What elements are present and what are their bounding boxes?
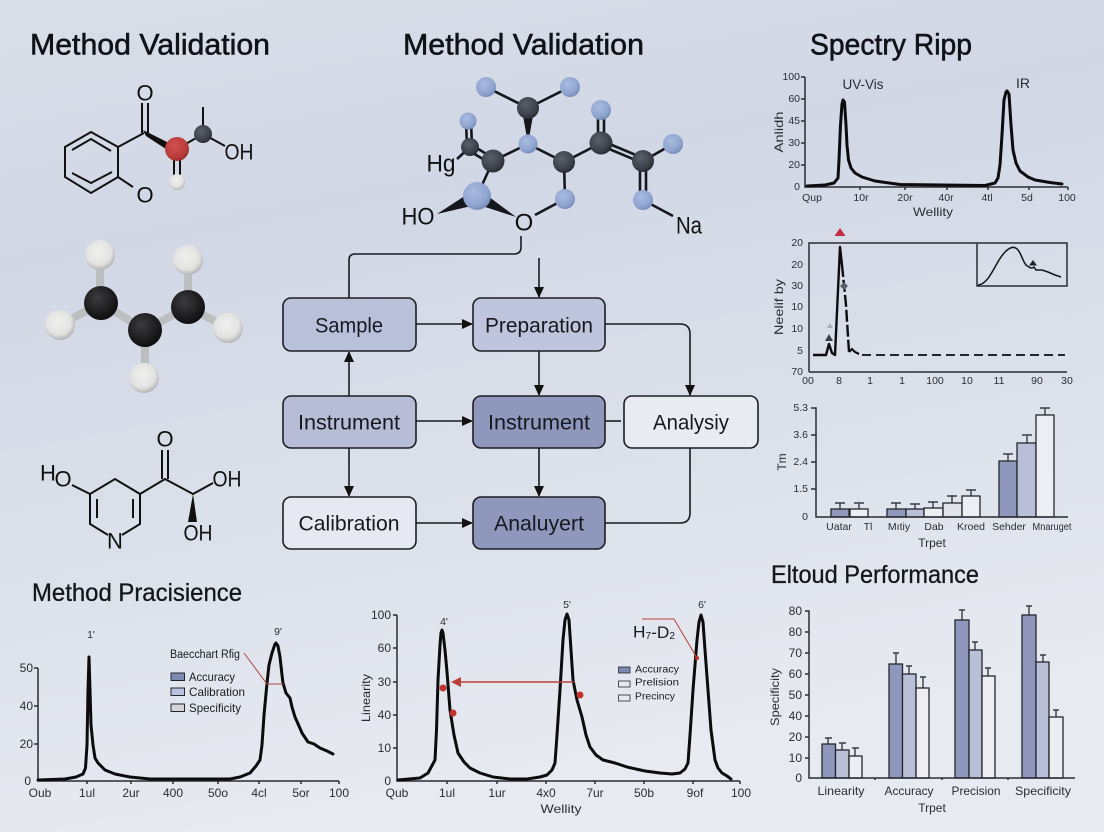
inset spectrum [978, 247, 1061, 285]
chart: UV-Vis and IR spectrum [772, 71, 1076, 219]
chart: dashed peak with inset: 8 [836, 375, 842, 387]
chart: linearity spectrum with three peaks: -D [651, 622, 669, 642]
legend: Accuracy [189, 670, 235, 684]
legend: Prelision [635, 678, 679, 688]
chart: precision spectrum with legend: 4cl [251, 786, 267, 800]
chart: dashed peak with inset: 10 [791, 301, 803, 313]
molecule: central ball and stick with labels: HO [402, 204, 434, 230]
chart: linearity spectrum with three peaks: 7ur [586, 786, 604, 800]
chart: UV-Vis and IR spectrum: 100 [782, 71, 800, 83]
chart: top grouped bars: Dab [924, 521, 944, 533]
chart: precision spectrum with legend: 1' [87, 629, 95, 641]
legend [170, 649, 245, 715]
flowchart [283, 236, 758, 549]
box: instrument centre [473, 396, 605, 448]
chart: method performance bars: Specificity [768, 668, 782, 726]
chart: linearity spectrum with three peaks: 30 [378, 675, 391, 689]
chart: dashed peak with inset: 30 [1061, 375, 1073, 387]
chart: dashed peak with inset: 10 [791, 323, 803, 335]
chart: linearity spectrum with three peaks: 1ul [439, 786, 455, 800]
box: calibration [283, 497, 416, 549]
chart: precision spectrum with legend: 5or [292, 786, 310, 800]
chart: linearity spectrum with three peaks: 60 [378, 641, 391, 655]
box: preparation [473, 298, 605, 351]
arrow: molecule to preparation [538, 258, 540, 297]
red annotation [440, 619, 699, 716]
legend: Calibration [189, 685, 245, 699]
chart: linearity spectrum with three peaks: 6' [698, 599, 706, 611]
molecule: pyridine skeletal structure [40, 426, 242, 554]
heading: performance: Eltoud Performance [771, 561, 979, 589]
legend: Precincy [635, 692, 675, 702]
chart: top grouped bars: Uatar [826, 521, 852, 533]
arrow: calibration to analuyert [416, 522, 472, 524]
chart: top grouped bars: Tl [864, 521, 872, 533]
chart: precision spectrum with legend: 1ul [79, 786, 95, 800]
chart: UV-Vis and IR spectrum: 20 [788, 159, 800, 171]
chart: dashed peak with inset: 70 [791, 366, 803, 378]
chart: method performance bars: 40 [789, 709, 802, 723]
arrow: instrument to calibration [348, 448, 350, 496]
chart: method performance bars: 60 [789, 667, 802, 681]
chart: precision spectrum with legend: 20 [20, 737, 33, 751]
chart: dashed peak with inset: 11 [994, 375, 1005, 387]
chart: precision spectrum with legend: 40 [20, 699, 33, 713]
heading: method precision: Method Pracisience [32, 579, 242, 607]
chart: UV-Vis and IR spectrum: 100 [1058, 192, 1076, 204]
chart: linearity spectrum with three peaks: 5' [563, 599, 571, 611]
chart: precision spectrum with legend: 0 [24, 774, 31, 788]
box: analuyert [473, 497, 605, 549]
chart: UV-Vis and IR spectrum: 5d [1021, 192, 1033, 204]
molecule: pyridine skeletal structure: OH [212, 466, 242, 492]
connector: molecule to sample [349, 236, 521, 298]
chart: precision spectrum with legend: 2ur [122, 786, 140, 800]
chart: top grouped bars [775, 402, 1072, 550]
chart: linearity spectrum with three peaks: 100 [731, 786, 751, 800]
chart: dashed peak with inset: 30 [791, 280, 803, 292]
chart: linearity spectrum with three peaks: H [633, 622, 645, 642]
chart: method performance bars: Trpet [918, 801, 946, 815]
arrow: preparation to instrument [538, 351, 540, 395]
chart: method performance bars: 80 [789, 604, 802, 618]
molecule: ball and stick model [45, 240, 243, 393]
chart: linearity spectrum with three peaks: 10 [378, 741, 391, 755]
chart: top grouped bars: 1.5 [793, 483, 808, 495]
legend: Specificity [189, 701, 241, 715]
chart: dashed peak with inset: 00 [802, 375, 814, 387]
chart: linearity spectrum with three peaks: Wellity [540, 802, 582, 816]
molecule: pyridine skeletal structure: O [54, 466, 72, 492]
chart: top grouped bars: Mıtiy [888, 521, 911, 533]
chart: UV-Vis and IR spectrum: 0 [794, 181, 800, 193]
chart: method performance bars: Linearity [818, 784, 864, 798]
chart: method performance bars: Precision [952, 784, 1000, 798]
chart: precision spectrum with legend: 50o [208, 786, 228, 800]
chart: dashed peak with inset: 5 [797, 345, 803, 357]
chart: linearity spectrum with three peaks: 7 [645, 630, 652, 642]
arrow: sample to preparation [416, 323, 472, 325]
chart: UV-Vis and IR spectrum: Anlidh [772, 112, 786, 152]
chart: UV-Vis and IR spectrum: 45 [788, 115, 800, 127]
legend [618, 664, 679, 702]
chart: UV-Vis and IR spectrum: 4tl [981, 192, 993, 204]
legend: Accuracy [635, 664, 679, 676]
chart: linearity spectrum with three peaks: 9of [687, 786, 704, 800]
molecule: central ball and stick with labels: Na [676, 212, 703, 240]
chart: method performance bars: 20 [789, 730, 802, 744]
chart: precision spectrum with legend: 9' [274, 626, 282, 638]
chart: method performance bars: 80 [789, 625, 802, 639]
chart: precision spectrum with legend: Oub [29, 786, 52, 800]
chart: linearity spectrum with three peaks: 100 [371, 608, 391, 622]
chart: dashed peak with inset: 20 [791, 237, 803, 249]
chart: UV-Vis and IR spectrum: Qup [802, 192, 822, 204]
chart: precision spectrum with legend: 50 [20, 661, 33, 675]
chart: UV-Vis and IR spectrum: 10r [853, 192, 869, 204]
title: centre: Method Validation [403, 28, 644, 62]
box: instrument centre: Instrument [488, 412, 590, 434]
legend: Baecchart Rfig [170, 649, 240, 661]
box: calibration: Calibration [298, 512, 400, 536]
chart: dashed peak with inset [772, 228, 1073, 387]
chart: linearity spectrum with three peaks: 2 [669, 630, 675, 642]
box: sample [283, 298, 416, 351]
chart: precision spectrum with legend [20, 626, 349, 800]
chart: top grouped bars: Trpet [918, 536, 946, 550]
molecule: pyridine skeletal structure: O [156, 426, 174, 452]
chart: dashed peak with inset: Neelif by [772, 279, 786, 335]
molecule: pyridine skeletal structure: OH [184, 520, 212, 546]
connector: instrument to analysis [605, 420, 621, 422]
molecule: central ball and stick with labels: Hg [426, 150, 456, 178]
chart: UV-Vis and IR spectrum: 30 [788, 137, 800, 149]
title: left: Method Validation [30, 28, 270, 62]
chart: UV-Vis and IR spectrum: UV-Vis [842, 76, 884, 92]
molecule: benzene structure with red atom [65, 80, 254, 208]
arrow: instrument to analuyert [538, 448, 540, 496]
arrow: instrument to instrument [416, 420, 472, 422]
box: sample: Sample [315, 314, 383, 338]
molecule: central ball and stick with labels [402, 77, 703, 240]
chart: linearity spectrum with three peaks [359, 599, 751, 816]
chart: linearity spectrum with three peaks: Linearity [359, 674, 373, 722]
chart: linearity spectrum with three peaks: 1ur [488, 786, 506, 800]
chart: top grouped bars: Kroed [957, 521, 985, 533]
chart: linearity spectrum with three peaks: 4' [440, 616, 448, 628]
chart: dashed peak with inset: 20 [791, 259, 803, 271]
box: instrument left [283, 396, 416, 448]
chart: method performance bars [768, 604, 1075, 815]
molecule: benzene structure with red atom: O [136, 182, 154, 208]
chart: method performance bars: 10 [789, 751, 802, 765]
molecule: central ball and stick with labels: O [515, 210, 533, 236]
chart: top grouped bars: Sehder [992, 521, 1026, 533]
box: analysis [624, 396, 758, 448]
callout leader [244, 653, 283, 684]
chart: method performance bars: 70 [789, 646, 802, 660]
box: instrument left: Instrument [298, 412, 400, 434]
molecule: benzene structure with red atom: O [136, 80, 154, 106]
arrow: preparation to analysis [605, 324, 690, 395]
chart: precision spectrum with legend: 100 [329, 786, 349, 800]
chart: dashed peak with inset: 1 [867, 375, 873, 387]
chart: UV-Vis and IR spectrum: 60 [788, 93, 800, 105]
chart: linearity spectrum with three peaks: 0 [384, 774, 391, 788]
chart: linearity spectrum with three peaks: Qub [386, 786, 409, 800]
chart: UV-Vis and IR spectrum: 20r [897, 192, 913, 204]
chart: method performance bars: 50 [789, 688, 802, 702]
chart: UV-Vis and IR spectrum: Wellity [913, 205, 953, 219]
arrow: instrument to sample [348, 352, 350, 396]
box: analuyert: Analuyert [494, 512, 584, 536]
molecule: pyridine skeletal structure: H [40, 460, 56, 486]
chart: dashed peak with inset: 10 [961, 375, 973, 387]
chart: method performance bars: Specificity [1015, 784, 1071, 798]
chart: linearity spectrum with three peaks: 50b [634, 786, 654, 800]
chart: precision spectrum with legend: 400 [163, 786, 183, 800]
chart: dashed peak with inset: 100 [926, 375, 944, 387]
chart: UV-Vis and IR spectrum: IR [1016, 75, 1030, 91]
box: analysis: Analysiy [653, 412, 729, 434]
title: right: Spectry Ripp [810, 28, 972, 62]
chart: top grouped bars: 5.3 [793, 402, 808, 414]
chart: linearity spectrum with three peaks: 4x0 [536, 786, 556, 800]
molecule: benzene structure with red atom: OH [224, 140, 254, 164]
chart: top grouped bars: 3.6 [793, 429, 808, 441]
chart: method performance bars: Accuracy [884, 784, 934, 798]
connector: analysis to analuyert [605, 448, 690, 523]
chart: UV-Vis and IR spectrum: 40r [938, 192, 954, 204]
chart: dashed peak with inset: 90 [1031, 375, 1043, 387]
chart: method performance bars: 0 [795, 771, 802, 785]
chart: linearity spectrum with three peaks: 40 [378, 708, 391, 722]
chart: top grouped bars: Mnaruget [1032, 521, 1072, 533]
chart: top grouped bars: Tm [775, 453, 789, 471]
chart: dashed peak with inset: 1 [899, 375, 905, 387]
chart: top grouped bars: 0 [802, 511, 808, 523]
box: preparation: Preparation [485, 314, 593, 338]
chart: top grouped bars: 2.4 [793, 456, 808, 468]
molecule: pyridine skeletal structure: N [107, 528, 123, 554]
